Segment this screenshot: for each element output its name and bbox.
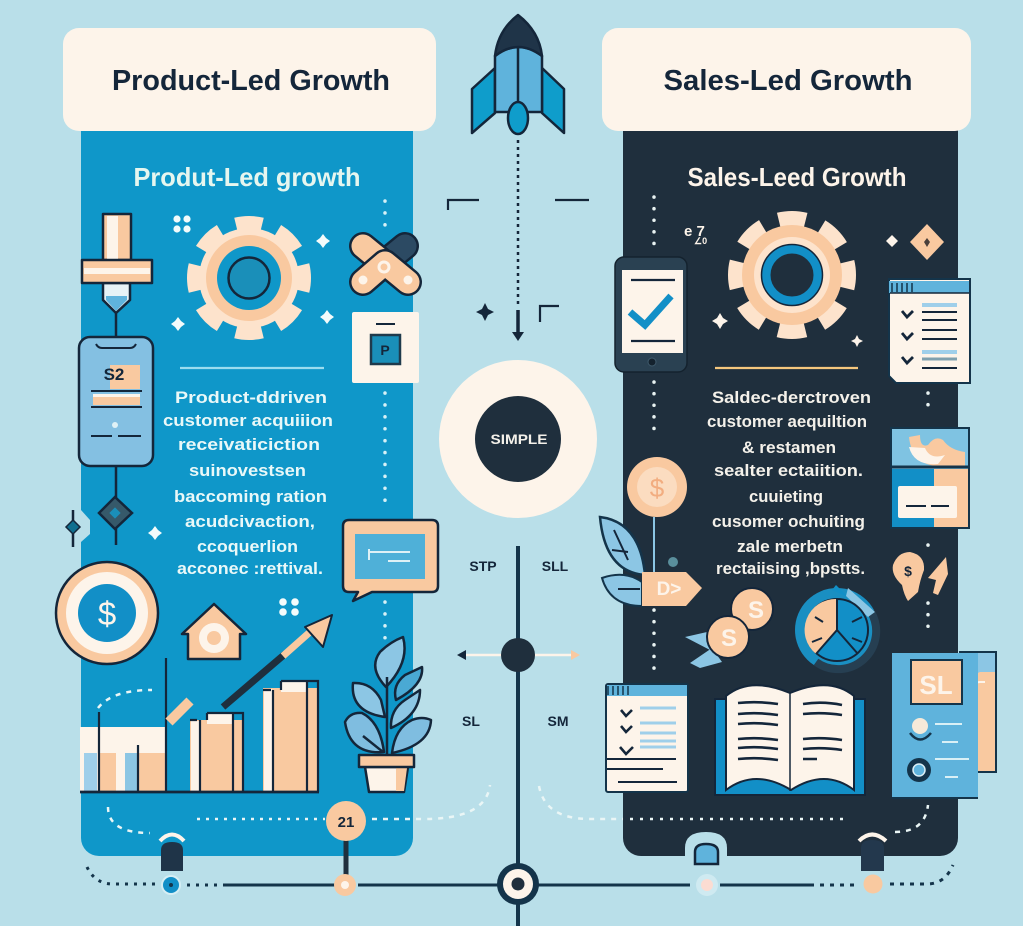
panel title: Sales-Leed Growth: Sales-Leed Growth [688, 162, 906, 192]
icon: bulb and arrow [893, 552, 948, 601]
icon: tablet with check [615, 257, 687, 372]
small glyphs: e 7 [684, 223, 705, 240]
arch connector: left [160, 834, 184, 871]
dashed white curves: left [98, 690, 928, 833]
text block: right description: sealter ectaiition. [714, 461, 863, 480]
heading card: Sales-Led Growth [602, 28, 971, 131]
node: 21 [326, 801, 366, 878]
corner marks [448, 200, 589, 322]
timeline node: pink [696, 874, 718, 896]
icon: rocket [472, 15, 564, 134]
icon: leaves and price tag [600, 517, 702, 606]
heading card: Product-Led Growth [63, 28, 436, 131]
text block: left description: suinovestsen [189, 461, 306, 480]
icon: coin right [627, 457, 687, 517]
text block: right description: rectaiising ,bpstts. [716, 559, 865, 578]
timeline node: peach [334, 874, 356, 896]
label: SLL: SLL [542, 558, 569, 574]
icon: checklist lower left [606, 684, 688, 792]
icon: dollar coins: S [721, 625, 737, 652]
text block: left description: Product-ddriven [175, 388, 327, 407]
dots: upper left [173, 215, 191, 233]
icon: dollar coins: S [748, 597, 764, 624]
divider: right [715, 367, 858, 369]
text block: left description [163, 388, 333, 578]
sparkle: centre [476, 303, 494, 321]
heading card: Sales-Led Growth: Sales-Led Growth [664, 65, 912, 97]
text block: right description: cusomer ochuiting [712, 512, 865, 531]
dotted guides: left panel [383, 201, 387, 638]
label: STP: STP [469, 558, 497, 574]
sparkles: left panel [148, 234, 334, 540]
text block: right description: cuuieting [749, 487, 823, 506]
label: SL: SL [462, 713, 480, 729]
icon: image card [891, 428, 969, 528]
label: SM: SM [548, 713, 568, 729]
text block: right description: & restamen [742, 438, 836, 457]
text block: right description: zale merbetn [737, 537, 843, 556]
timeline [87, 865, 953, 885]
icon: speech bubble [343, 520, 438, 601]
node: 21: 21 [338, 814, 354, 831]
axis node [501, 638, 535, 672]
panel: product-led growth [81, 110, 413, 856]
dotted trajectory with arrow [512, 140, 524, 341]
text block: left description: acudcivaction, [185, 512, 315, 531]
card: P badge: P [380, 342, 390, 358]
icon: dollar coin: $ [98, 595, 116, 632]
timeline node: peach right [864, 874, 882, 894]
circle badge: SIMPLE: SIMPLE [490, 431, 548, 447]
central vertical axis [516, 546, 520, 926]
bar chart with growth arrow [80, 615, 332, 792]
icon: SL profile card [892, 652, 996, 798]
dotted guides: right panel [654, 197, 928, 672]
icon: small diamond pin [66, 510, 90, 547]
text block: left description: ccoquerlion [197, 537, 298, 556]
card: P badge [352, 312, 419, 383]
icon: SL profile card: SL [919, 670, 953, 700]
connector and diamond [99, 466, 132, 545]
text block: right description: customer aequiltion [707, 412, 867, 431]
icon: right gear [738, 221, 846, 329]
connector: coin to tag [653, 517, 655, 572]
text block: left description: acconec :rettival. [177, 559, 323, 578]
icon: open book [715, 685, 865, 795]
icon: dollar coins [685, 588, 773, 668]
small glyph marks: ∠0 [694, 236, 707, 246]
panel: sales-led growth [623, 110, 958, 856]
icon: bandage X [358, 246, 412, 284]
text block: left description: customer acquiiion [163, 411, 333, 430]
icon: pie chart [795, 585, 879, 672]
icon: coin right: $ [650, 473, 665, 503]
panel title: Produt-Led growth: Produt-Led growth [134, 162, 360, 192]
icon: dollar coin [56, 562, 158, 664]
text block: right description: Saldec-derctroven [712, 388, 871, 407]
dots: near house [279, 598, 299, 616]
text block: left description: receivaticiction [178, 435, 320, 454]
icon: house [182, 604, 246, 659]
icon: phone S2 [79, 337, 153, 466]
icon: left gear [197, 226, 301, 330]
icon: checklist upper right [889, 279, 970, 383]
timeline node: blue [161, 875, 181, 895]
text block: left description: baccoming ration [174, 487, 327, 506]
icon: leaves and price tag: D> [657, 579, 681, 600]
sparkles: right panel [712, 235, 898, 347]
arch connector: far right [859, 834, 886, 871]
heading card: Product-Led Growth: Product-Led Growth [112, 65, 390, 97]
timeline node: centre [497, 863, 539, 905]
icon: phone S2: S2 [104, 365, 124, 384]
text block: right description [707, 388, 871, 578]
icon: bulb and arrow: $ [904, 563, 912, 579]
horizontal double arrow [457, 650, 580, 660]
divider: left [180, 367, 324, 369]
icon: pen tool [82, 214, 152, 338]
icon: potted plant [345, 637, 431, 792]
arch connector: centre right [685, 832, 727, 864]
circle badge: SIMPLE [439, 360, 597, 518]
icon: peach diamond [910, 224, 944, 260]
